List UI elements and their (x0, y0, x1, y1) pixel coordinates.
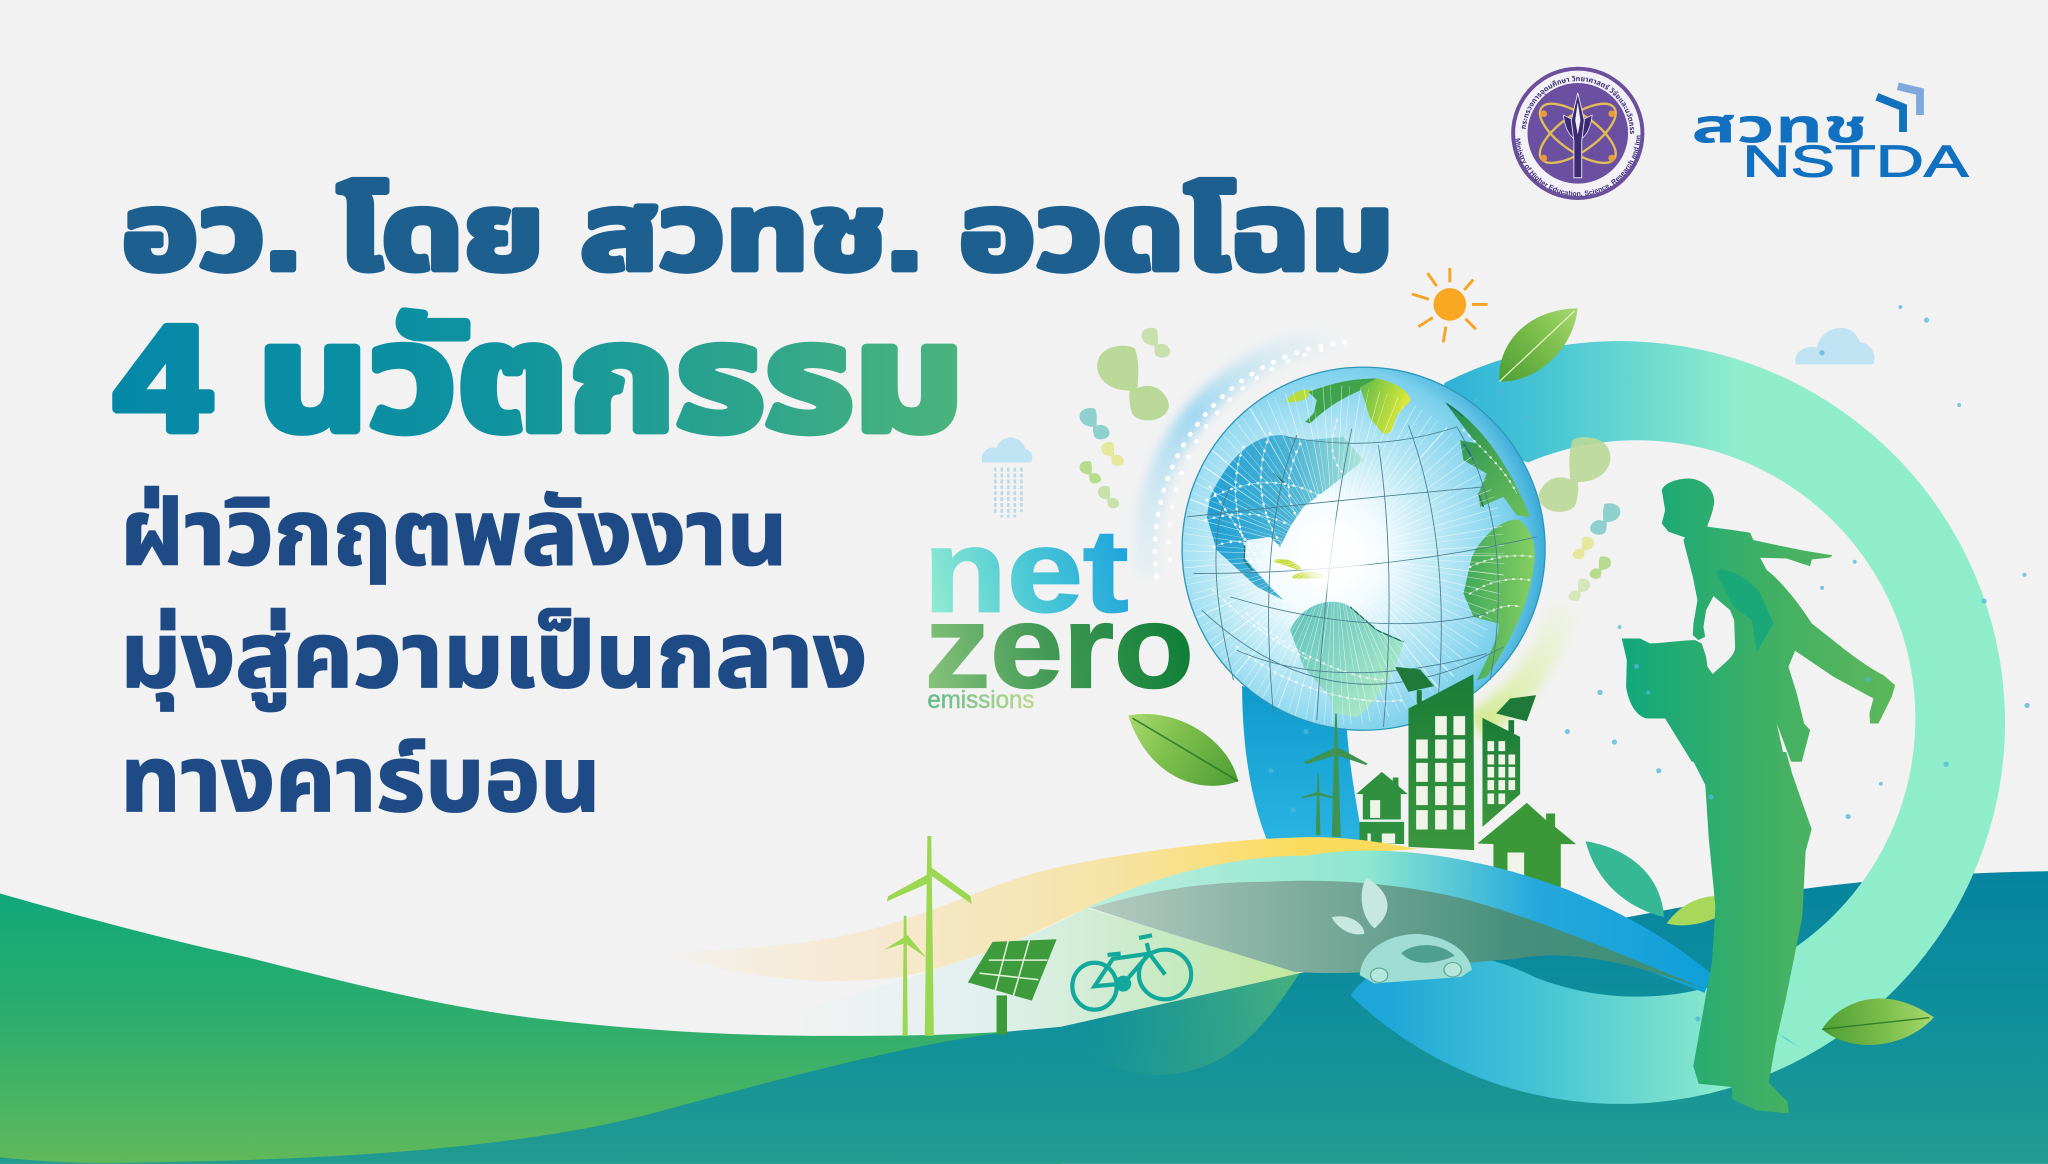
Europe (1445, 402, 1530, 517)
coast details (1244, 404, 1483, 642)
logo: ministry seal: Ministry of Higher Education, Science, Research and Innovation (1515, 136, 1640, 197)
side tower windows (1487, 741, 1515, 804)
grey green wedge (1091, 881, 1704, 989)
green wave (0, 894, 1061, 1164)
large house (1477, 803, 1576, 890)
title line 1: อว. โดย สวทช. อวดโฉม (121, 172, 1394, 292)
light rays (1250, 470, 1420, 640)
small house (1356, 772, 1408, 844)
subtitle text block: มุ่งสู่ความเป็นกลาง (120, 605, 867, 711)
teal sea base (0, 871, 2048, 1164)
North America (1207, 435, 1363, 600)
leaf bottom right (1820, 994, 1936, 1049)
logo: NSTDA (1691, 86, 1969, 186)
globe (1182, 367, 1545, 730)
wind turbines left (884, 836, 972, 1036)
globe glow arcs (1146, 337, 1563, 726)
logo: NSTDA: NSTDA (1742, 137, 1969, 186)
subtitle text block (120, 482, 867, 831)
leaf left (1114, 694, 1250, 806)
ring left arm (1242, 686, 1364, 849)
lime leaf (1667, 896, 1721, 925)
rain cloud (982, 438, 1032, 517)
side tower (1482, 718, 1520, 827)
mint blue ribbon (1087, 851, 1712, 993)
sun icon (1412, 268, 1488, 342)
cloud top right (1795, 328, 1875, 365)
leaf top (1483, 291, 1592, 396)
title line 2: 4 นวัตกรรม (115, 295, 964, 462)
net zero logotype: net (923, 505, 1128, 636)
logo: NSTDA: สวทช (1691, 99, 1868, 152)
child and father upper silhouette (1622, 478, 1895, 762)
tall building (1408, 674, 1474, 850)
subtitle text block: ทางคาร์บอน (120, 729, 601, 831)
scattered dots (1268, 305, 2030, 1022)
bicycle (1072, 935, 1191, 1010)
car leaves (1332, 878, 1387, 934)
graticule (1187, 425, 1537, 727)
India landmass (1360, 379, 1411, 434)
teal leaf (1586, 841, 1664, 917)
blue ribbon sliver (1776, 1032, 1800, 1048)
solar panel (968, 939, 1057, 1035)
building windows (1416, 716, 1465, 830)
green wave tail (1032, 973, 1300, 1075)
Africa (1463, 520, 1535, 680)
net zero logotype: emissions (927, 687, 1034, 714)
network and graticule (1187, 420, 1537, 727)
butterflies (1080, 328, 1620, 601)
network dots (1205, 420, 1533, 701)
wind turbines in city (1302, 714, 1367, 837)
continents (1207, 379, 1535, 717)
subtitle text block: ฝ่าวิกฤตพลังงาน (120, 482, 788, 584)
pale green field (758, 908, 1300, 1034)
net zero logotype: zero (925, 581, 1194, 712)
net zero logotype (923, 505, 1194, 714)
Eurasia north (1305, 379, 1383, 424)
logo: ministry seal (1511, 66, 1644, 200)
blue infinity ring (1351, 341, 2005, 1104)
South America (1290, 602, 1403, 717)
electric car (1332, 878, 1472, 983)
solar panels on roof (1395, 667, 1536, 734)
Caribbean islands (1273, 559, 1325, 579)
Greenland (1285, 390, 1310, 402)
green city (1302, 667, 1576, 890)
child torso shade (1715, 569, 1773, 652)
father lower body (1689, 752, 1812, 1113)
yellow wave band (664, 837, 1417, 981)
